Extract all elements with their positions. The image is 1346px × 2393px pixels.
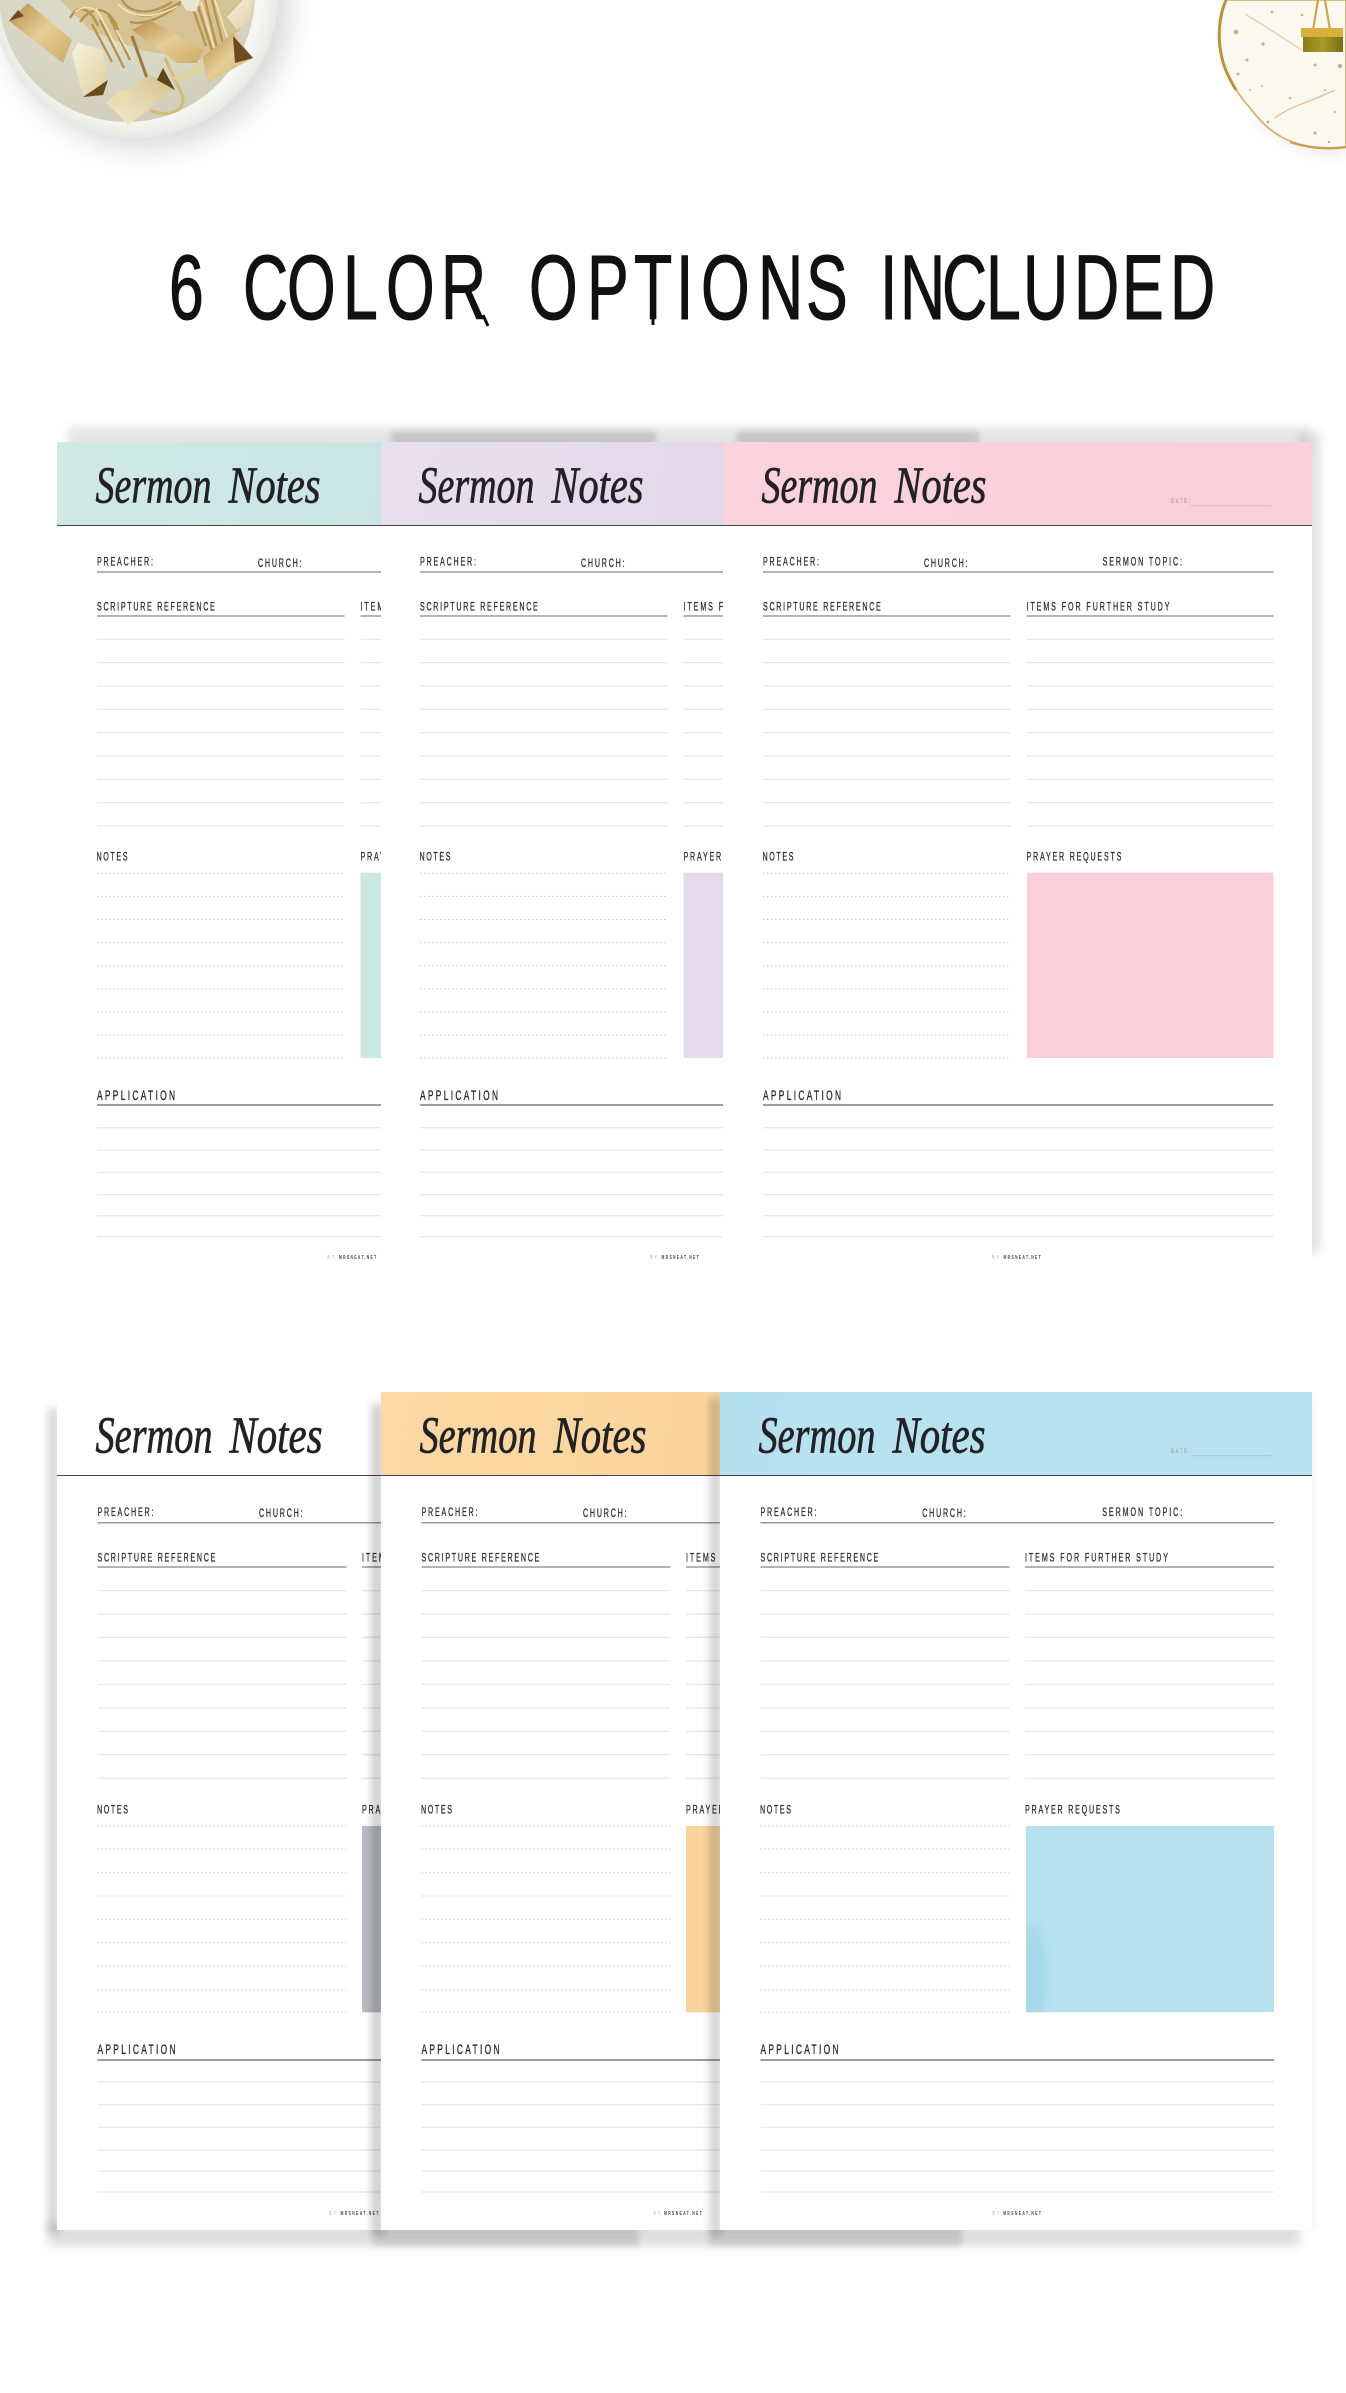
- panel: pink sermon notes page: [723, 442, 1312, 1272]
- header band: teal: [56, 442, 381, 526]
- section: items for further study: ITEMS FOR FURTHER STUDY: [1026, 601, 1170, 614]
- form header fields: PREACHER:: [420, 556, 476, 569]
- date field: [1170, 1448, 1271, 1456]
- footer credit: BY: [327, 1254, 334, 1260]
- heading: Sermon Notes: Sermon: [758, 1408, 875, 1465]
- form header fields: SERMON TOPIC:: [1102, 1506, 1182, 1520]
- footer credit: BY: [992, 2210, 999, 2216]
- footer credit: BY: [992, 1254, 999, 1260]
- section: prayer requests: [684, 851, 930, 1058]
- section: application: APPLICATION: [420, 1089, 498, 1104]
- section: application: APPLICATION: [97, 2043, 175, 2058]
- page content: [95, 1408, 381, 2216]
- section: scripture reference: SCRIPTURE REFERENCE: [420, 601, 538, 614]
- section: prayer requests: PRAYER REQUESTS: [1026, 851, 1121, 864]
- section: items for further study: [1026, 601, 1274, 826]
- section: scripture reference: [422, 1552, 935, 1778]
- form header fields: CHURCH:: [924, 557, 968, 571]
- footer credit: MRSNEAT.NET: [1004, 1254, 1041, 1260]
- section: application: APPLICATION: [96, 1089, 174, 1104]
- heading: Sermon Notes: [95, 1408, 322, 1465]
- section: notes: [421, 1804, 670, 2012]
- form header fields: CHURCH:: [583, 1507, 627, 1521]
- section: application: APPLICATION: [760, 2043, 838, 2058]
- heading: Sermon Notes: Notes: [551, 458, 644, 515]
- section: prayer requests: [360, 851, 607, 1058]
- section: prayer requests: [362, 1804, 610, 2012]
- page content: [758, 1408, 1274, 2216]
- heading: Sermon Notes: Notes: [227, 458, 320, 515]
- form header fields: SERMON TOPIC:: [1103, 556, 1182, 569]
- panel: teal sermon notes page: [56, 442, 381, 1272]
- heading: Sermon Notes: Sermon: [95, 1408, 212, 1465]
- heading: Sermon Notes: Sermon: [762, 458, 878, 515]
- photo: speckled plate with gold clip: [1218, 0, 1346, 157]
- section: notes: NOTES: [762, 851, 794, 864]
- form header fields: PREACHER:: [97, 1506, 153, 1520]
- section: scripture reference: SCRIPTURE REFERENCE: [97, 1552, 215, 1565]
- date field: DATE:: [1170, 1448, 1189, 1455]
- section: application: APPLICATION: [422, 2043, 499, 2058]
- panel: orange sermon notes page: [381, 1392, 720, 2230]
- section: application: [420, 1089, 930, 1237]
- section: prayer requests: [1020, 1804, 1274, 2031]
- section: application: [96, 1089, 606, 1237]
- form header fields: CHURCH:: [581, 557, 625, 571]
- section: notes: [762, 851, 1010, 1058]
- section: scripture reference: [96, 601, 606, 826]
- form header fields: PREACHER:: [422, 1506, 477, 1520]
- section: prayer requests: [1026, 851, 1274, 1058]
- page content: [95, 458, 381, 1260]
- footer credit: BY: [328, 2210, 335, 2216]
- section: prayer requests: PRAYER REQUESTS: [1024, 1804, 1119, 1817]
- heading: Sermon Notes: [420, 1408, 646, 1465]
- footer credit: MRSNEAT.NET: [338, 1254, 376, 1260]
- form header fields: [420, 556, 930, 572]
- heading: Sermon Notes: Sermon: [418, 458, 534, 515]
- section: scripture reference: SCRIPTURE REFERENCE: [96, 601, 214, 614]
- heading: Sermon Notes: [758, 1408, 985, 1465]
- section: items for further study: [1024, 1552, 1274, 1778]
- form header fields: PREACHER:: [760, 1506, 816, 1520]
- section: scripture reference: [763, 601, 1010, 826]
- footer credit: MRSNEAT.NET: [340, 2210, 378, 2216]
- header band: purple: [381, 442, 723, 526]
- section: scripture reference: SCRIPTURE REFERENCE: [763, 601, 881, 614]
- date field: [1171, 498, 1271, 506]
- date field: DATE:: [1171, 498, 1190, 505]
- page content: [762, 458, 1274, 1260]
- header band: blue: [720, 1392, 1312, 1476]
- heading: Sermon Notes: Notes: [553, 1408, 646, 1465]
- form header fields: CHURCH:: [258, 557, 301, 571]
- form header fields: [422, 1506, 935, 1523]
- section: scripture reference: [420, 601, 930, 826]
- section: application: [760, 2043, 1274, 2192]
- footer credit: BY: [654, 2210, 660, 2216]
- form header fields: CHURCH:: [922, 1507, 965, 1521]
- section: notes: [760, 1804, 1009, 2012]
- section: application: [97, 2043, 610, 2192]
- header band: pink: [723, 442, 1312, 526]
- section: notes: NOTES: [421, 1804, 452, 1817]
- form header fields: PREACHER:: [96, 556, 152, 569]
- page content: [420, 1408, 720, 2216]
- heading: Sermon Notes: Notes: [891, 1408, 985, 1465]
- form header fields: [96, 556, 606, 572]
- section: notes: NOTES: [96, 1804, 128, 1817]
- section: notes: [420, 851, 668, 1058]
- form header fields: PREACHER:: [763, 556, 819, 569]
- footer credit: BY: [650, 1254, 657, 1260]
- panel: blue sermon notes page: [720, 1392, 1312, 2230]
- section: application: [763, 1089, 1274, 1237]
- panel: purple sermon notes page: [381, 442, 723, 1272]
- page content: [418, 458, 723, 1260]
- footer credit: MRSNEAT.NET: [664, 2210, 702, 2216]
- section: application: [422, 2043, 935, 2192]
- section: scripture reference: [97, 1552, 610, 1778]
- heading: Sermon Notes: Sermon: [95, 458, 211, 515]
- footer credit: MRSNEAT.NET: [1003, 2210, 1041, 2216]
- section: application: APPLICATION: [763, 1089, 841, 1104]
- header band: orange: [381, 1392, 720, 1476]
- section: prayer requests: [686, 1804, 935, 2012]
- heading: Sermon Notes: Sermon: [420, 1408, 536, 1465]
- heading: Sermon Notes: Notes: [894, 458, 986, 515]
- form header fields: [97, 1506, 610, 1523]
- form header fields: CHURCH:: [258, 1507, 302, 1521]
- panel: white sermon notes page: [56, 1392, 381, 2230]
- section: notes: NOTES: [760, 1804, 791, 1817]
- section: notes: NOTES: [420, 851, 451, 864]
- section: notes: [96, 1804, 346, 2012]
- section: scripture reference: SCRIPTURE REFERENCE: [760, 1552, 878, 1565]
- photo: bowl of gold binder clips: [0, 0, 301, 159]
- section: notes: [96, 851, 344, 1058]
- section: scripture reference: [760, 1552, 1009, 1778]
- form header fields: [760, 1506, 1274, 1523]
- footer credit: MRSNEAT.NET: [662, 1254, 699, 1260]
- section: items for further study: ITEMS FOR FURTHER STUDY: [1024, 1552, 1168, 1565]
- header band: white: [56, 1392, 381, 1476]
- section: notes: NOTES: [96, 851, 127, 864]
- heading: Sermon Notes: Notes: [228, 1408, 322, 1465]
- section: scripture reference: SCRIPTURE REFERENCE: [422, 1552, 539, 1565]
- title: 6 COLOR OPTIONS INCLUDED: [169, 236, 1215, 339]
- form header fields: [763, 556, 1274, 572]
